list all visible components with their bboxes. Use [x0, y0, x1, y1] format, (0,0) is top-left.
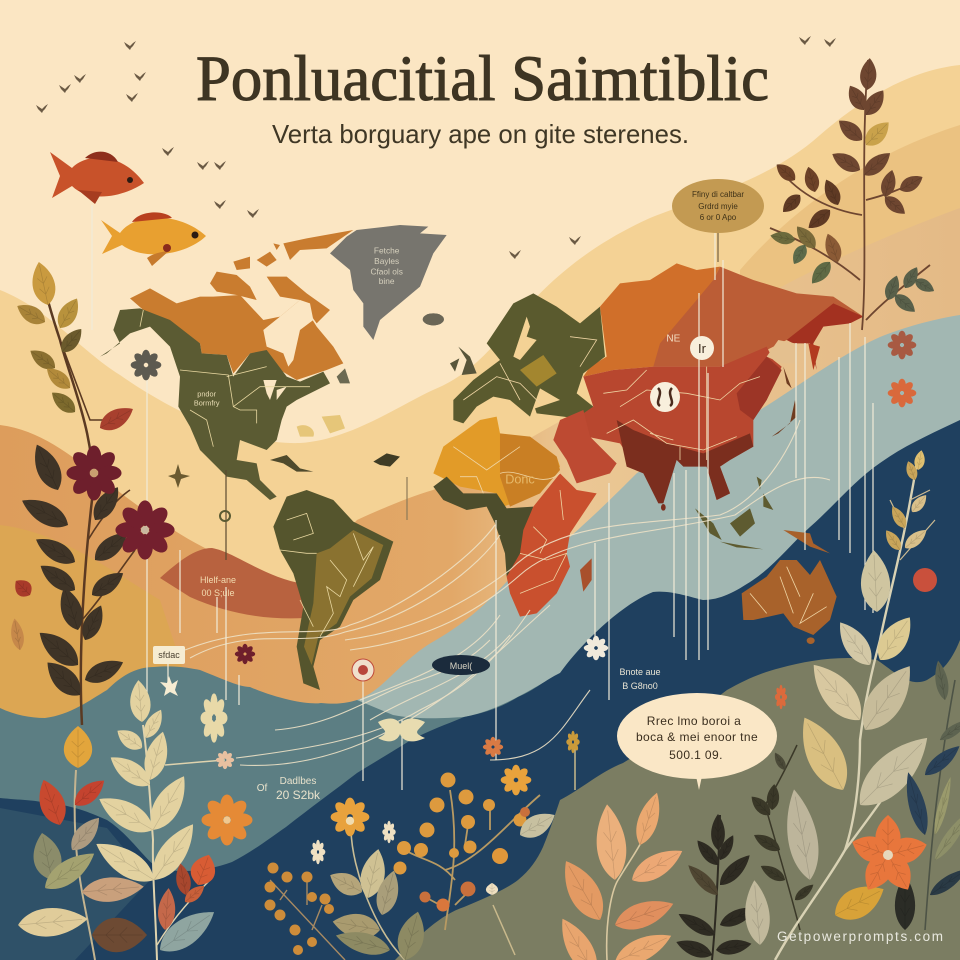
icon: small star: [168, 464, 190, 488]
plant: right berries: [394, 772, 540, 930]
Greenland label: Bayles: [374, 256, 399, 266]
label: upper-left map note: 00 S;ule: [201, 588, 235, 598]
plant: red leaves: [157, 851, 220, 945]
Japan and Sakhalin: [772, 367, 797, 437]
background: gold wave, left: [0, 525, 200, 720]
title: Ponluacitial Saimtiblic: [196, 43, 769, 115]
plant: top-right branch: [769, 57, 937, 330]
icon: spoked flower: [131, 350, 161, 380]
icon: starburst on ocean: [584, 636, 608, 660]
icon: white star marker: [160, 676, 178, 696]
plant: blue-grey leaf: [152, 901, 222, 960]
Asia label: NE: [666, 334, 681, 345]
Manchuria: [737, 357, 782, 420]
Greenland: [330, 225, 447, 340]
icon: ring marker: [220, 511, 230, 521]
plant: yellow-tip sprig: [486, 731, 580, 955]
South America, ochre interior: [304, 530, 383, 665]
fish: yellow: [101, 212, 206, 266]
flow lines: [185, 420, 830, 765]
plant: cream leaves on teal: [90, 679, 225, 960]
callout: top oval: [672, 179, 764, 262]
plant: centre leaves with orange flower: [325, 830, 430, 960]
label: upper-left map note: Hlelf-ane: [200, 575, 236, 585]
North America west and south: [100, 308, 330, 500]
Sri Lanka: [661, 504, 666, 511]
Australia: [742, 560, 837, 635]
flower: small cream left: [311, 840, 325, 864]
plant: navy sprig: [882, 449, 935, 560]
map border lines: [453, 337, 827, 623]
background: deeper yellow wave, upper right: [740, 125, 960, 400]
callout: top oval: 6 or 0 Apo: [700, 213, 737, 222]
icon: orange star on olive: [775, 685, 787, 709]
label: black pill: Muel(: [450, 661, 472, 671]
Tasmania: [807, 637, 815, 644]
label: white tag: sfdac: [158, 650, 180, 660]
map: Americas and Greenland: [100, 225, 447, 690]
Russia west: [583, 263, 720, 377]
central Europe ochre: [520, 355, 557, 387]
label: teal note: Dadlbes: [280, 776, 316, 787]
North America label: Bormfry: [194, 398, 220, 407]
plant: dark sprig behind: [747, 745, 816, 930]
callout: speech bubble: boca & mei enoor tne: [636, 730, 758, 744]
mid-ocean island: [373, 453, 400, 467]
flower: orange tulip right: [501, 765, 531, 795]
callout: speech bubble: [617, 693, 777, 790]
flower: dark red upper: [66, 445, 122, 501]
background: navy wave: [0, 420, 960, 960]
plant: left branch with dark leaves: [8, 260, 137, 725]
plant: peach leaves: [552, 790, 688, 960]
Arabia: [553, 410, 617, 483]
plant: large pale leaves: [742, 455, 940, 960]
Africa, west coast olive: [433, 477, 533, 577]
Southeast Asian islands: [695, 477, 773, 549]
label: navy note: Bnote aue: [619, 667, 661, 677]
Madagascar: [580, 558, 592, 592]
Newfoundland: [337, 368, 350, 383]
Central Asia red: [583, 347, 782, 500]
background: tan wave: [0, 208, 960, 720]
map border lines: [140, 310, 373, 637]
flower: rosette: [888, 331, 916, 359]
background: teal wave: [0, 666, 560, 960]
New Guinea: [783, 530, 830, 553]
vertical leader lines: [92, 205, 873, 790]
fish: red: [50, 152, 144, 204]
British Isles: [450, 347, 477, 375]
label: black pill: [432, 655, 490, 675]
Africa scribble label: Donc: [505, 472, 535, 486]
map: Europe, Africa, Asia, Australia: [423, 263, 863, 644]
flower: big orange: [202, 794, 252, 846]
Hudson Bay: [263, 300, 313, 367]
Iceland: [423, 313, 444, 325]
South America: [273, 490, 393, 690]
icon: small bud: [483, 737, 503, 757]
flower: cream starburst: [201, 693, 227, 743]
subtitle: Verta borguary ape on gite sterenes.: [272, 119, 689, 149]
watermark: Getpowerprompts.com: [777, 929, 943, 944]
callout: top oval: Ffiny di caltbar: [692, 190, 744, 199]
Greenland label: Fetche: [374, 245, 399, 255]
icon: maroon flower: [235, 644, 255, 664]
flower: dark red lower: [115, 500, 175, 560]
Iceland fragment: [423, 313, 443, 325]
flower: red on navy: [913, 568, 937, 592]
icon: white globe marker: [650, 382, 680, 412]
Africa, central ochre: [500, 433, 560, 507]
icon: white marker Ir: [690, 336, 714, 360]
icon: pink bud: [216, 751, 234, 769]
Sea of Okhotsk: [767, 340, 797, 363]
flower: orange star: [888, 379, 916, 407]
Canada: [130, 288, 343, 380]
background: light blue wave: [357, 315, 960, 960]
Africa, east and south: [507, 473, 597, 617]
Far East dark red: [787, 303, 863, 370]
icon: cream butterfly: [378, 718, 425, 741]
Great Lakes: [263, 380, 287, 400]
callout: top oval: Grdrd myie: [698, 202, 738, 211]
label: white tag: [153, 646, 185, 664]
background: olive hill: [395, 640, 960, 960]
South Asia: [617, 420, 753, 503]
plant: dark leaves: [674, 814, 759, 960]
icon: round red-white marker: [352, 659, 374, 681]
Caribbean islands: [270, 455, 313, 472]
Russia east: [653, 267, 863, 367]
Baltic sea: [513, 317, 537, 360]
background: terracotta hump: [160, 548, 305, 618]
North America label: pndor: [197, 390, 216, 399]
Europe: [453, 293, 605, 423]
Greenland label: Cfaol ols: [370, 267, 403, 277]
callout: speech bubble: 500.1 09.: [669, 748, 723, 762]
flower: orange centre: [331, 798, 369, 836]
background: blue-slate corner: [0, 808, 150, 960]
icon: grey leaf tuft: [515, 806, 560, 844]
Greenland label: bine: [379, 276, 395, 286]
label: navy note: B G8no0: [622, 681, 658, 691]
plant: far-right shadow leaves: [895, 660, 960, 930]
Kamchatka: [808, 343, 820, 370]
Arctic islands: [210, 230, 353, 323]
flower: small cream right: [382, 821, 396, 843]
small ochre scribbles: [297, 415, 345, 437]
plant: left berries: [264, 862, 345, 960]
label: teal note prefix: Of: [257, 783, 267, 794]
icons: birds: [36, 36, 836, 259]
plant: mixed leaves with yellow bud: [17, 726, 147, 960]
callout: speech bubble: Rrec lmo boroi a: [647, 714, 741, 728]
icon: white marker Ir: Ir: [698, 341, 707, 356]
flower: orange five-petal: [848, 815, 930, 896]
Africa, Sahara yellow: [433, 417, 560, 507]
label: teal note: 20 S2bk: [276, 788, 321, 802]
